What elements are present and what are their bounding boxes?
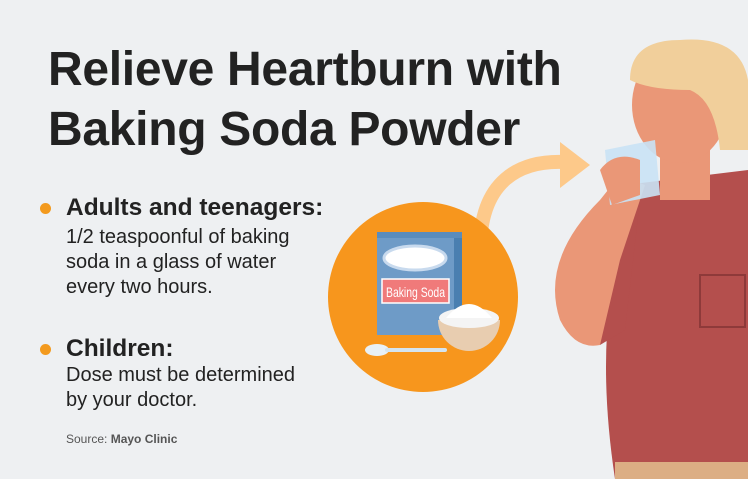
bullet dot bbox=[40, 344, 51, 355]
source: Source: Mayo Clinic bbox=[66, 432, 177, 446]
bullet: adults bbox=[40, 194, 323, 298]
title bbox=[48, 43, 562, 156]
bullet: children bbox=[40, 335, 295, 411]
adults text: Adults and teenagers: bbox=[66, 194, 323, 221]
bullet: children: Dose must be determined bbox=[66, 364, 295, 386]
circle with baking soda: Baking Soda bbox=[386, 284, 445, 300]
bullet: children: by your doctor. bbox=[66, 389, 197, 411]
circle with baking soda bbox=[328, 202, 518, 392]
title: Baking Soda Powder bbox=[48, 103, 520, 156]
title: Relieve Heartburn with bbox=[48, 43, 562, 96]
bullet: adults: soda in a glass of water bbox=[66, 251, 276, 273]
children text: Children: bbox=[66, 335, 174, 362]
bullet: adults: every two hours. bbox=[66, 276, 213, 298]
bullet: adults: 1/2 teaspoonful of baking bbox=[66, 226, 290, 248]
bullet dot bbox=[40, 203, 51, 214]
arrow bbox=[480, 142, 590, 250]
man bbox=[555, 40, 748, 479]
